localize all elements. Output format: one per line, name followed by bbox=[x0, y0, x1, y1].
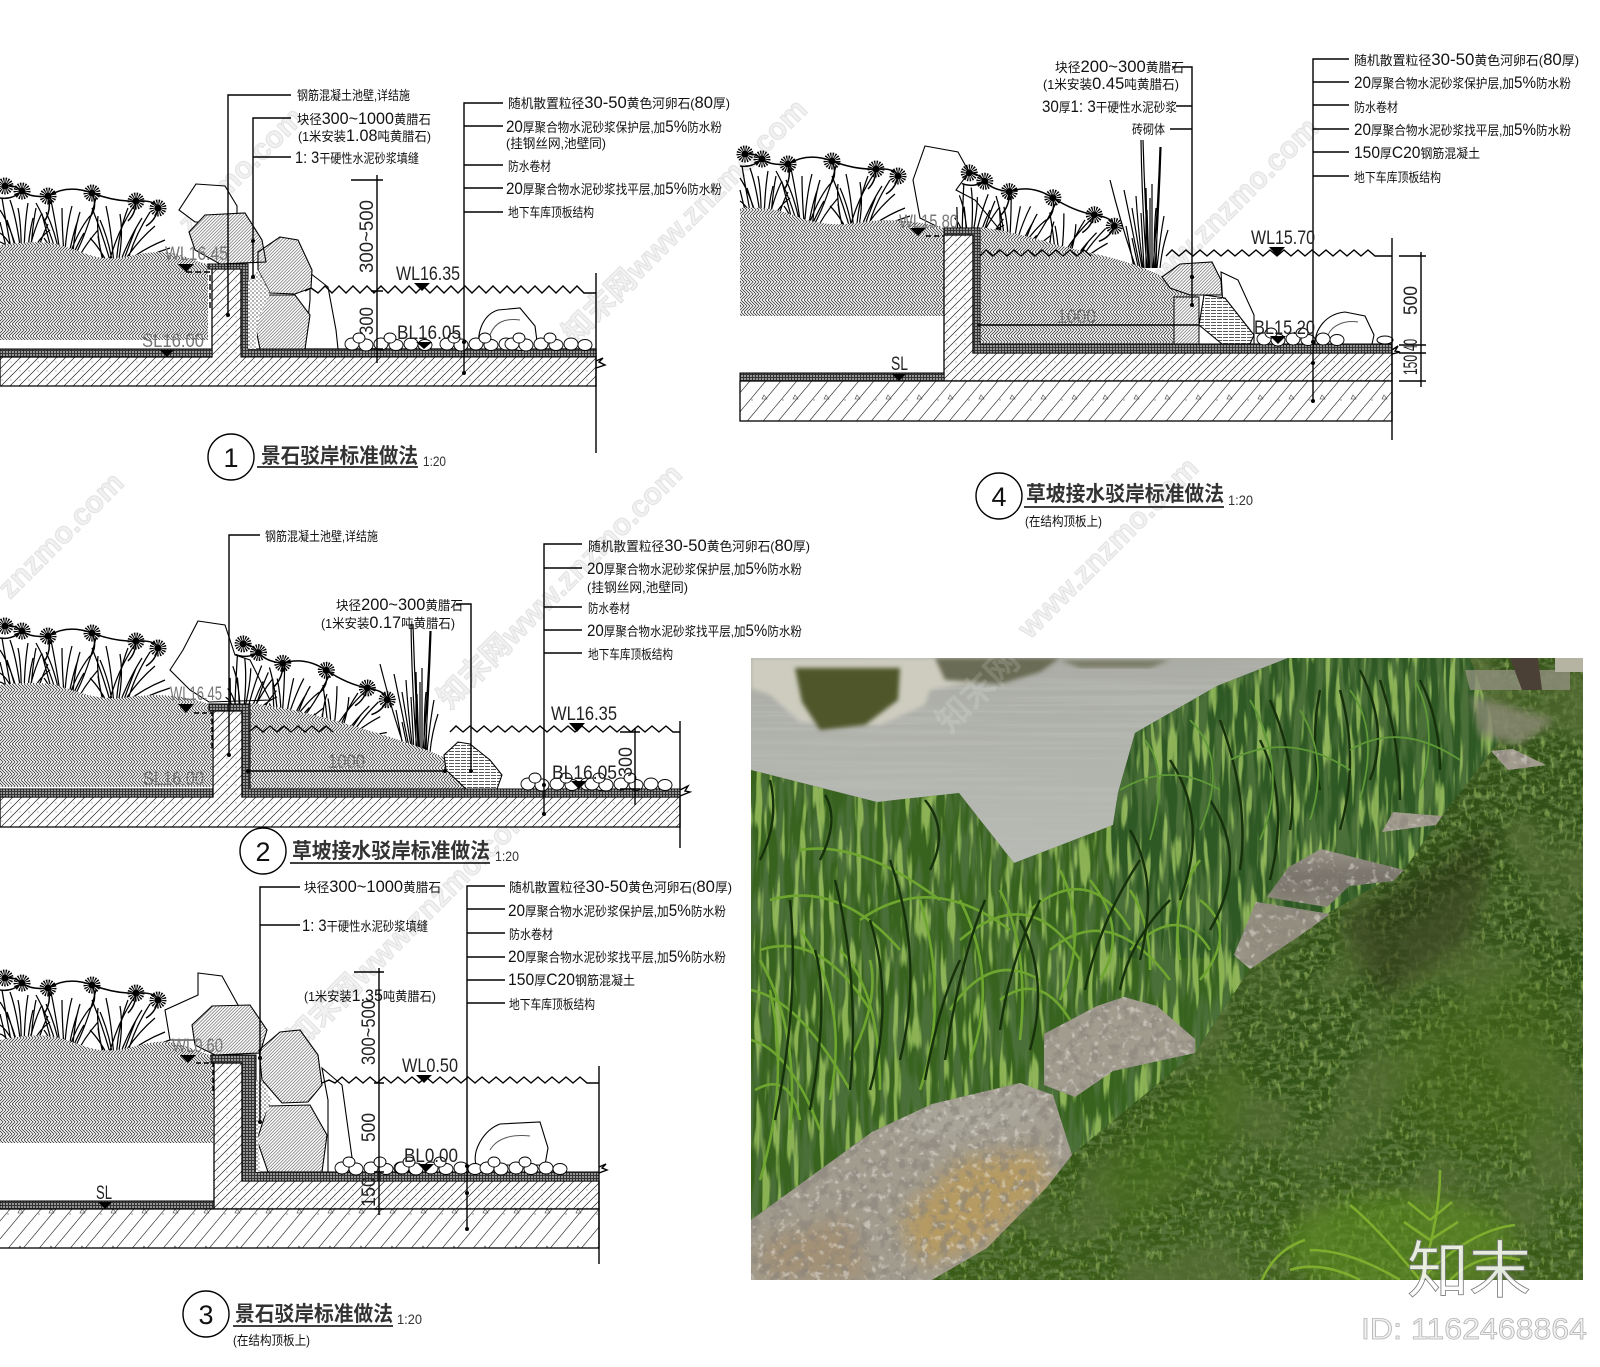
level marks: WL16.35 bbox=[551, 704, 617, 725]
panel 3: rock revetment on roof slab bbox=[0, 877, 732, 1348]
callouts right bbox=[506, 93, 730, 220]
planting soil bbox=[0, 1035, 213, 1143]
dimension: 300 bbox=[357, 307, 378, 335]
mortar joint bbox=[248, 270, 270, 349]
title 4: 4 bbox=[991, 482, 1007, 512]
waterproof layers bbox=[0, 704, 680, 797]
panel 4: grass slope revetment on roof slab bbox=[739, 50, 1579, 529]
callouts right: 防水卷材 bbox=[588, 601, 630, 616]
level marks: SL bbox=[96, 1183, 112, 1204]
callouts right: 地下车库顶板结构 bbox=[588, 647, 673, 662]
rocks bbox=[751, 740, 1583, 1280]
level marks: SL bbox=[891, 354, 908, 375]
site watermarks: 知末网www.znzmo.com bbox=[432, 458, 689, 715]
leader dots bbox=[226, 239, 466, 375]
waterproof layers bbox=[0, 264, 596, 357]
dimension bbox=[354, 968, 384, 1215]
level marks: SL16.00 bbox=[143, 769, 204, 790]
concrete slab and wall bbox=[944, 235, 1392, 381]
callouts right: 随机散置粒径30-50黄色河卵石(80厚) bbox=[1354, 50, 1579, 69]
callouts right: 随机散置粒径30-50黄色河卵石(80厚) bbox=[508, 93, 730, 112]
level marks bbox=[142, 244, 461, 357]
callouts right bbox=[508, 877, 732, 1012]
grass base bbox=[751, 817, 1442, 1280]
rocks behind bbox=[170, 621, 270, 702]
hatched boulder bbox=[444, 742, 502, 789]
pebbles bbox=[521, 773, 672, 791]
leader lines bbox=[260, 886, 505, 1229]
concrete wall and slab bbox=[214, 1063, 599, 1209]
callouts right bbox=[1354, 50, 1579, 185]
callouts left: 30厚1: 3干硬性水泥砂浆 bbox=[1042, 97, 1177, 116]
bright fern bbox=[1285, 1195, 1515, 1295]
level marks bbox=[96, 1036, 458, 1209]
edge line bbox=[599, 1066, 607, 1264]
dimension: 40 bbox=[1401, 339, 1422, 351]
title 2: 草坡接水驳岸标准做法 bbox=[292, 840, 490, 863]
hatched boulders bbox=[189, 213, 312, 349]
leader dots bbox=[1190, 275, 1315, 403]
callouts right: 20厚聚合物水泥砂浆保护层,加5%防水粉 bbox=[506, 117, 722, 136]
level marks: WL16.45 bbox=[165, 244, 228, 265]
rocks behind bbox=[913, 146, 1254, 344]
callouts left: (1米安装0.45吨黄腊石) bbox=[1043, 74, 1179, 93]
dimension: 300~500 bbox=[359, 1000, 380, 1065]
title 4 bbox=[976, 473, 1253, 529]
callouts left bbox=[1042, 57, 1184, 137]
photo: rock and grass shoreline bbox=[751, 642, 1583, 1295]
water level line bbox=[322, 1077, 599, 1083]
concrete slab and wall bbox=[0, 711, 680, 827]
site watermarks: 知末网www.znzmo.com bbox=[282, 798, 539, 1055]
callouts left: 块径200~300黄腊石 bbox=[336, 595, 463, 614]
dimension bbox=[351, 175, 383, 363]
reeds bbox=[1110, 140, 1168, 268]
dimension: 500 bbox=[1401, 286, 1422, 315]
callouts left bbox=[302, 877, 441, 1005]
callouts left bbox=[295, 88, 431, 167]
pebbles and feature stone bbox=[1257, 312, 1393, 346]
callouts left: 1: 3干硬性水泥砂浆填缝 bbox=[302, 916, 428, 935]
water reflection bbox=[751, 658, 1000, 725]
level marks: WL16.35 bbox=[396, 264, 460, 285]
zhimo logo watermark: 知末 bbox=[1407, 1237, 1531, 1306]
brick masonry bbox=[1174, 297, 1199, 344]
panel 1: rock revetment section bbox=[0, 88, 730, 480]
level marks bbox=[143, 684, 617, 790]
level marks: WL15.70 bbox=[1251, 228, 1315, 249]
title 3 bbox=[183, 1291, 422, 1348]
mid lawn highlight bbox=[1390, 960, 1570, 1150]
leader lines bbox=[228, 95, 503, 373]
callouts right: (挂钢丝网,池壁同) bbox=[506, 136, 606, 151]
title 4: (在结构顶板上) bbox=[1025, 514, 1102, 529]
leader lines bbox=[229, 535, 582, 814]
level marks: BL15.20 bbox=[1254, 318, 1315, 339]
callouts left: (1米安装1.08吨黄腊石) bbox=[298, 126, 431, 145]
site watermarks bbox=[0, 93, 1325, 1055]
level marks bbox=[891, 212, 1315, 381]
water level line bbox=[305, 286, 596, 293]
callouts right: 防水卷材 bbox=[509, 927, 553, 942]
planting bbox=[0, 620, 170, 708]
water bbox=[751, 658, 1288, 863]
title 2: 1:20 bbox=[495, 848, 519, 864]
callouts left: 块径300~1000黄腊石 bbox=[297, 109, 431, 128]
title 3: (在结构顶板上) bbox=[233, 1333, 310, 1348]
image id: ID: 1162468864 bbox=[1361, 1313, 1587, 1346]
concrete slab and pool wall bbox=[0, 269, 596, 386]
level marks: WL16.45 bbox=[170, 684, 222, 705]
level marks: BL16.05 bbox=[397, 323, 461, 344]
title 4: 1:20 bbox=[1228, 492, 1253, 508]
waterproof layers bbox=[740, 228, 1392, 381]
site watermarks: www.znzmo.com bbox=[1011, 452, 1205, 646]
callouts right: 地下车库顶板结构 bbox=[1354, 170, 1441, 185]
rocks behind bbox=[179, 184, 338, 349]
level marks: WL0.50 bbox=[402, 1056, 458, 1077]
dimension: 150 bbox=[1401, 355, 1422, 375]
title 2 bbox=[240, 828, 519, 874]
dimension: 300 bbox=[616, 747, 637, 777]
leader dots bbox=[227, 753, 546, 816]
planting soil bbox=[740, 208, 1199, 344]
level marks: WL15.80 bbox=[899, 212, 958, 233]
dimension: 500 bbox=[359, 1113, 380, 1142]
callouts left: 1: 3干硬性水泥砂浆填缝 bbox=[295, 148, 419, 167]
level marks: SL16.00 bbox=[142, 331, 204, 352]
level marks: WL0.60 bbox=[172, 1036, 223, 1057]
callouts left: 钢筋混凝土池壁,详结施 bbox=[297, 88, 410, 103]
title 4: 草坡接水驳岸标准做法 bbox=[1026, 483, 1224, 506]
mortar joint bbox=[256, 1080, 272, 1172]
title 1 bbox=[208, 434, 446, 480]
title 1: 1:20 bbox=[423, 453, 446, 469]
leader lines bbox=[1170, 59, 1349, 401]
callouts right: 20厚聚合物水泥砂浆找平层,加5%防水粉 bbox=[506, 179, 722, 198]
dimension bbox=[616, 728, 640, 805]
callouts left: 块径300~1000黄腊石 bbox=[304, 877, 441, 896]
roof slab bbox=[0, 1209, 599, 1248]
callouts right: 地下车库顶板结构 bbox=[508, 205, 594, 220]
callouts right: 防水卷材 bbox=[1354, 100, 1398, 115]
slope planting bbox=[219, 637, 405, 761]
leader dots bbox=[258, 1056, 469, 1231]
dark lawn hollow bbox=[1340, 820, 1500, 1000]
planting bbox=[0, 180, 170, 268]
edge line bbox=[680, 721, 690, 848]
title 1: 景石驳岸标准做法 bbox=[261, 445, 418, 468]
planting soil bbox=[0, 683, 466, 789]
callouts right: 20厚聚合物水泥砂浆找平层,加5%防水粉 bbox=[1354, 120, 1571, 139]
dimension: 300~500 bbox=[357, 200, 378, 273]
callouts right: 地下车库顶板结构 bbox=[509, 997, 595, 1012]
callouts left bbox=[265, 529, 463, 632]
edge line bbox=[1392, 238, 1400, 440]
callouts left: (1米安装0.17吨黄腊石) bbox=[321, 613, 455, 632]
callouts right: 防水卷材 bbox=[508, 159, 551, 174]
edge break line bbox=[596, 273, 605, 453]
water level line bbox=[249, 726, 680, 732]
callouts right: 20厚聚合物水泥砂浆找平层,加5%防水粉 bbox=[508, 947, 726, 966]
callouts left: 钢筋混凝土池壁,详结施 bbox=[265, 529, 378, 544]
hatched boulders bbox=[1162, 262, 1222, 295]
pebbles and feature stone bbox=[335, 1122, 567, 1175]
planting soil mound bbox=[0, 242, 208, 340]
roof slab bbox=[740, 381, 1392, 421]
title 3: 景石驳岸标准做法 bbox=[235, 1303, 393, 1326]
planting bbox=[0, 972, 170, 1060]
level marks: 1000 bbox=[328, 752, 365, 773]
water level line bbox=[980, 250, 1392, 256]
title 3: 3 bbox=[198, 1300, 214, 1330]
site watermarks: 知末网www.znzmo.com bbox=[557, 93, 814, 350]
dimension bbox=[1399, 252, 1426, 387]
dimension: 150 bbox=[359, 1177, 380, 1207]
callouts left: 砖砌体 bbox=[1132, 122, 1165, 137]
lawn bbox=[900, 658, 1583, 1295]
site watermarks: www.znzmo.com bbox=[1131, 112, 1325, 306]
pebbles and feature stone bbox=[345, 308, 592, 351]
title 3: 1:20 bbox=[397, 1311, 422, 1327]
callouts right: 随机散置粒径30-50黄色河卵石(80厚) bbox=[588, 536, 810, 555]
rock colour patches bbox=[760, 860, 1410, 1280]
callouts right: 20厚聚合物水泥砂浆保护层,加5%防水粉 bbox=[1354, 73, 1571, 92]
callouts right: 20厚聚合物水泥砂浆找平层,加5%防水粉 bbox=[587, 621, 802, 640]
reeds bbox=[380, 624, 438, 752]
panel 2: grass slope revetment bbox=[0, 529, 810, 874]
callouts right: 20厚聚合物水泥砂浆保护层,加5%防水粉 bbox=[508, 901, 726, 920]
title 2: 2 bbox=[255, 837, 271, 867]
callouts right: (挂钢丝网,池壁同) bbox=[587, 580, 688, 595]
photo watermark text: 知末网 bbox=[929, 642, 1028, 741]
callouts right: 随机散置粒径30-50黄色河卵石(80厚) bbox=[509, 877, 732, 896]
callouts right: 150厚C20钢筋混凝土 bbox=[508, 970, 635, 989]
callouts right bbox=[587, 536, 810, 662]
level marks: 1000 bbox=[1057, 307, 1096, 328]
rocks behind bbox=[165, 973, 354, 1172]
title 1: 1 bbox=[223, 443, 239, 473]
callouts left: 块径200~300黄腊石 bbox=[1055, 57, 1184, 76]
site watermarks: znzmo.com bbox=[172, 101, 310, 240]
level marks: BL0.00 bbox=[404, 1146, 458, 1167]
slope planting bbox=[946, 166, 1132, 287]
level marks: BL16.05 bbox=[552, 763, 617, 784]
hatched boulders bbox=[192, 1005, 327, 1172]
paving and tree at top right bbox=[1465, 658, 1583, 745]
callouts right: 150厚C20钢筋混凝土 bbox=[1354, 143, 1480, 162]
callouts left: (1米安装1.35吨黄腊石) bbox=[304, 986, 436, 1005]
bank and clump grass bbox=[751, 658, 1500, 1220]
waterproof layers bbox=[0, 1055, 599, 1209]
callouts right: 20厚聚合物水泥砂浆保护层,加5%防水粉 bbox=[587, 559, 802, 578]
planting bbox=[739, 148, 910, 236]
